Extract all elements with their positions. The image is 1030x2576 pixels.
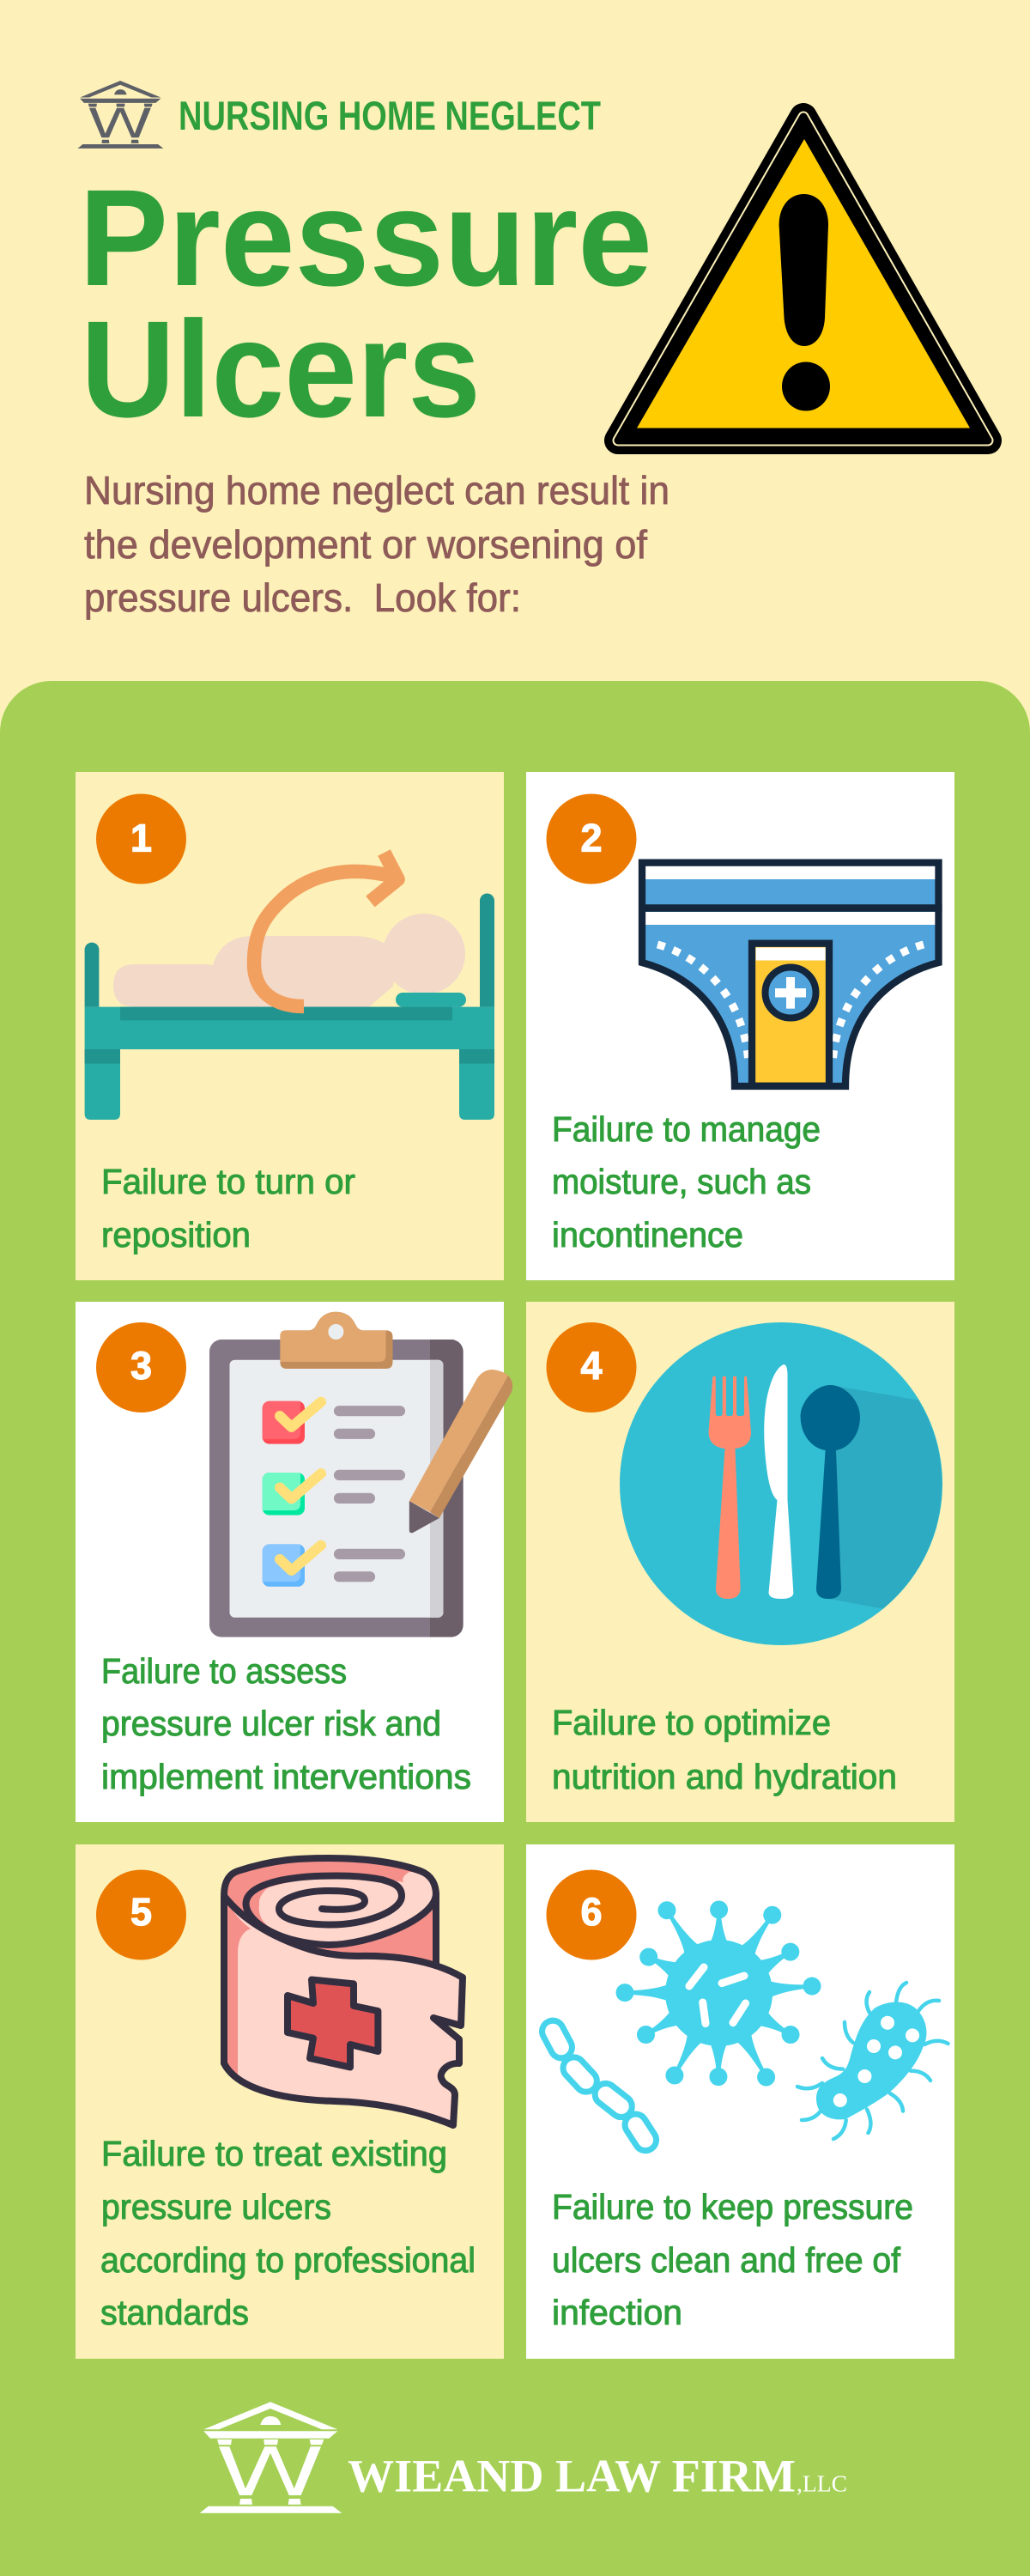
panel: card 2 moisture bbox=[526, 772, 954, 1280]
badge 4 bbox=[546, 1322, 637, 1413]
badge 1 bbox=[96, 793, 186, 884]
badge 3 bbox=[96, 1322, 186, 1413]
badge 5 bbox=[96, 1870, 186, 1959]
badge 6: 6 bbox=[580, 1890, 603, 1934]
panel: card 1 reposition bbox=[76, 772, 504, 1280]
icon: diaper bbox=[639, 863, 942, 1086]
caption 2: moisture, such as bbox=[552, 1162, 811, 1201]
caption 5: Failure to treat existing bbox=[101, 2134, 447, 2173]
icon: clipboard and pencil bbox=[209, 1312, 512, 1637]
title bbox=[79, 161, 652, 446]
footer firm name: WIEAND LAW FIRM bbox=[348, 2451, 796, 2502]
intro text: Nursing home neglect can result in bbox=[84, 468, 670, 513]
icon: bacterium bbox=[797, 1983, 948, 2139]
caption 3: pressure ulcer risk and bbox=[101, 1704, 441, 1743]
caption 5: pressure ulcers bbox=[101, 2187, 331, 2227]
caption 2 bbox=[552, 1109, 821, 1255]
caption 2: incontinence bbox=[552, 1215, 743, 1255]
logo: header temple bbox=[77, 81, 163, 149]
badge 5: 5 bbox=[130, 1890, 152, 1934]
caption 1: Failure to turn or bbox=[101, 1162, 355, 1201]
badge 3: 3 bbox=[130, 1344, 152, 1388]
panel: card 3 assessment bbox=[76, 1302, 512, 1822]
logo: footer temple bbox=[200, 2402, 342, 2513]
icon: plate with cutlery bbox=[620, 1322, 942, 1645]
caption 2: Failure to manage bbox=[552, 1109, 821, 1149]
caption 5: according to professional bbox=[100, 2240, 476, 2280]
caption 6: ulcers clean and free of bbox=[552, 2240, 901, 2280]
intro text: pressure ulcers. Look for: bbox=[84, 575, 521, 620]
kicker heading: NURSING HOME NEGLECT bbox=[179, 93, 601, 138]
intro text: the development or worsening of bbox=[84, 522, 647, 567]
caption 3: Failure to assess bbox=[101, 1651, 347, 1691]
caption 1 bbox=[101, 1162, 355, 1255]
caption 4: Failure to optimize bbox=[552, 1703, 831, 1742]
title: Pressure bbox=[79, 161, 652, 314]
panel: card 4 nutrition bbox=[526, 1302, 954, 1822]
caption 1: reposition bbox=[101, 1215, 251, 1255]
caption 5: standards bbox=[100, 2293, 249, 2332]
icon: virus bbox=[615, 1898, 821, 2090]
caption 6 bbox=[552, 2187, 913, 2332]
title: Ulcers bbox=[81, 292, 481, 446]
caption 3: implement interventions bbox=[101, 1757, 471, 1796]
caption 4 bbox=[552, 1703, 897, 1796]
badge 4: 4 bbox=[580, 1344, 603, 1388]
icon: bed with patient bbox=[85, 853, 494, 1120]
caption 4: nutrition and hydration bbox=[552, 1757, 897, 1796]
caption 5 bbox=[100, 2134, 476, 2332]
intro text bbox=[84, 468, 670, 620]
footer firm name: ,LLC bbox=[797, 2471, 847, 2497]
panel: card 6 infection bbox=[526, 1844, 954, 2359]
panel: card 5 treatment bbox=[76, 1844, 504, 2359]
badge 2 bbox=[546, 793, 637, 884]
badge 1: 1 bbox=[130, 816, 152, 860]
badge 2: 2 bbox=[580, 816, 603, 860]
badge 6 bbox=[546, 1870, 637, 1959]
icon: bacteria chain bbox=[538, 2017, 660, 2154]
caption 6: infection bbox=[552, 2293, 682, 2332]
icon: bandage roll bbox=[224, 1858, 463, 2125]
icon: warning triangle bbox=[618, 117, 988, 440]
caption 6: Failure to keep pressure bbox=[552, 2187, 913, 2227]
caption 3 bbox=[101, 1651, 471, 1796]
panel: green background bbox=[0, 681, 1030, 2576]
